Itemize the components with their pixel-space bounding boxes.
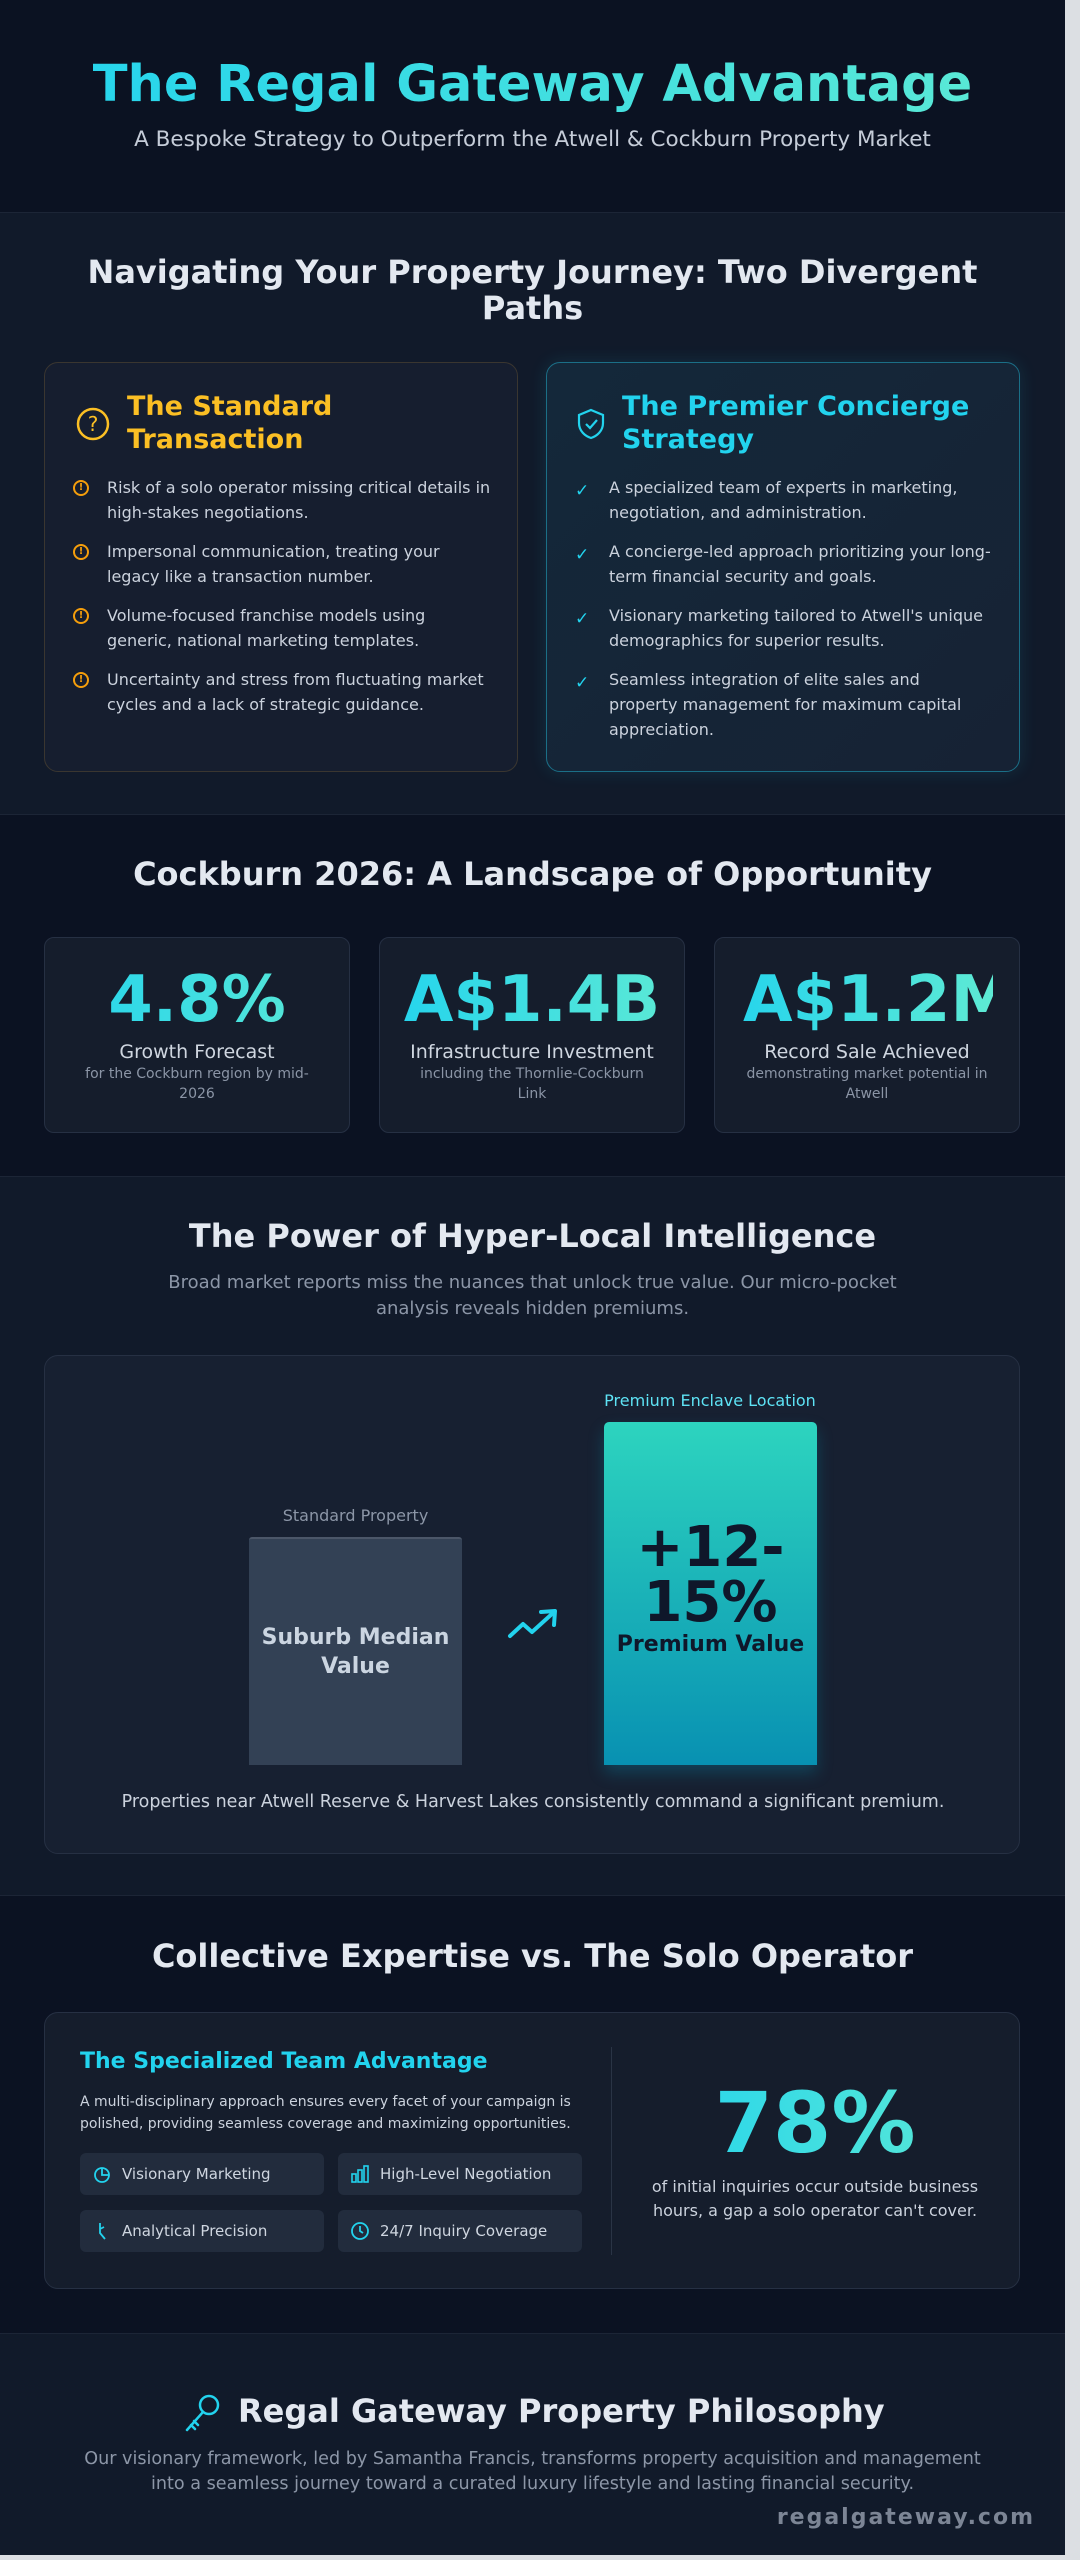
card heading: Strategy xyxy=(622,424,754,455)
stat card: record sale xyxy=(714,937,1020,1133)
heading: Navigating Your Property Journey: Two Divergent xyxy=(88,253,977,291)
bar: premium value: +12- xyxy=(636,1515,785,1580)
stat card: growth: for the Cockburn region by mid-2026 xyxy=(85,1066,309,1102)
section: Cockburn 2026 xyxy=(0,814,1065,1176)
icon: question: ? xyxy=(88,412,98,436)
heading: Cockburn 2026: A Landscape of Opportunity xyxy=(133,855,932,893)
card heading: The Standard xyxy=(127,391,332,422)
bullet list: ! xyxy=(79,610,83,621)
card heading xyxy=(127,391,332,455)
chip: analytical precision: Analytical Precision xyxy=(122,2222,267,2240)
big stat: 78%: 78% xyxy=(714,2074,916,2172)
bullet list: ! xyxy=(79,674,83,685)
description: A multi-disciplinary approach ensures every facet of your campaign is polished, providing seamless coverage and maximizing opportunities. xyxy=(80,2094,571,2132)
bullet list: Uncertainty and stress from fluctuating market cycles and a lack of strategic guidance. xyxy=(107,670,484,714)
chip: 24/7 coverage xyxy=(338,2210,582,2252)
bullet list: Impersonal communication, treating your xyxy=(107,542,440,561)
bar: suburb median: Value xyxy=(321,1654,390,1679)
chip: 24/7 coverage: 24/7 Inquiry Coverage xyxy=(380,2222,547,2240)
icon: shield xyxy=(578,408,604,440)
heading with key icon: Regal Gateway Property Philosophy xyxy=(238,2392,885,2430)
heading xyxy=(88,253,977,327)
stat card: growth: 4.8% xyxy=(108,963,286,1037)
chip: visionary marketing: Visionary Marketing xyxy=(122,2165,271,2183)
big stat: 78%: of initial inquiries occur outside business xyxy=(652,2177,978,2196)
chip: negotiation xyxy=(338,2153,582,2195)
heading: Collective Expertise vs. The Solo Operator xyxy=(152,1937,913,1975)
card heading: Transaction xyxy=(127,424,303,455)
title: The Regal Gateway Advantage xyxy=(93,55,972,114)
bar: suburb median xyxy=(249,1537,462,1765)
checklist: A concierge-led approach prioritizing your long-term financial security and goals. xyxy=(609,542,991,586)
stat card: infrastructure: including the Thornlie-Cockburn Link xyxy=(420,1066,644,1102)
stat card: growth: Growth Forecast xyxy=(119,1041,275,1063)
section: two paths xyxy=(0,212,1065,814)
chip: visionary marketing xyxy=(80,2153,324,2195)
paragraph: into a seamless journey toward a curated luxury lifestyle and lasting financial security. xyxy=(151,2474,914,2494)
bar: premium value xyxy=(604,1422,817,1765)
checklist: A specialized team of experts in marketing, negotiation, and administration. xyxy=(609,478,957,522)
subheading: The Specialized Team Advantage xyxy=(80,2049,488,2074)
label: standard property: Standard Property xyxy=(283,1506,428,1525)
chart panel xyxy=(44,1355,1020,1854)
checklist: ✓ xyxy=(575,673,589,693)
bullet list xyxy=(73,478,490,714)
bar: premium value: Premium Value xyxy=(617,1632,804,1657)
checklist xyxy=(575,478,991,739)
arrow: trending up xyxy=(508,1609,557,1638)
checklist: Seamless integration of elite sales and xyxy=(609,670,920,689)
header section xyxy=(0,0,1065,212)
paragraph: Our visionary framework, led by Samantha Francis, transforms property acquisition and management xyxy=(84,2449,981,2469)
big stat: 78%: hours, a gap a solo operator can't cover. xyxy=(653,2201,977,2220)
url: regalgateway.com xyxy=(777,2505,1035,2530)
stat card: growth xyxy=(44,937,350,1133)
chip: analytical precision xyxy=(80,2210,324,2252)
section: collective expertise xyxy=(0,1895,1065,2333)
heading: Paths xyxy=(482,289,583,327)
description: Broad market reports miss the nuances that unlock true value. Our micro-pocket analysis reveals hidden premiums. xyxy=(168,1272,897,1319)
bullet list: ! xyxy=(79,546,83,557)
checklist: ✓ xyxy=(575,481,589,501)
subtitle: A Bespoke Strategy to Outperform the Atwell & Cockburn Property Market xyxy=(134,127,931,152)
section: hyper-local intelligence xyxy=(0,1176,1065,1895)
bullet list: ! xyxy=(79,482,83,493)
bullet list: legacy like a transaction number. xyxy=(107,567,374,586)
panel: premier concierge xyxy=(546,362,1020,772)
icon: question xyxy=(76,408,110,440)
bar: premium value: 15% xyxy=(643,1570,778,1635)
chip: negotiation: High-Level Negotiation xyxy=(380,2165,551,2183)
bullet list: Volume-focused franchise models using xyxy=(107,606,425,625)
stat card: record sale: demonstrating market potential in Atwell xyxy=(747,1066,987,1102)
bar: suburb median: Suburb Median xyxy=(262,1625,449,1650)
checklist: ✓ xyxy=(575,545,589,565)
bullet list: generic, national marketing templates. xyxy=(107,631,419,650)
card heading: The Premier Concierge xyxy=(622,391,969,422)
bullet list: Risk of a solo operator missing critical details in high-stakes negotiations. xyxy=(107,478,490,522)
stat card: infrastructure xyxy=(379,937,685,1133)
panel: team advantage xyxy=(44,2012,1020,2289)
big stat: 78% xyxy=(652,2074,978,2220)
stat card: record sale: Record Sale Achieved xyxy=(764,1041,970,1063)
checklist: Visionary marketing tailored to Atwell's unique demographics for superior results. xyxy=(609,606,983,650)
stat card: infrastructure: A$1.4B xyxy=(404,963,660,1037)
panel: standard transaction xyxy=(44,362,518,772)
paragraph xyxy=(84,2449,981,2494)
heading: The Power of Hyper-Local Intelligence xyxy=(189,1217,876,1255)
icon: key xyxy=(186,2394,220,2432)
card heading xyxy=(622,391,969,455)
checklist: property management for maximum capital appreciation. xyxy=(609,695,961,739)
label: premium enclave: Premium Enclave Location xyxy=(604,1391,816,1410)
caption: Properties near Atwell Reserve & Harvest Lakes consistently command a significant premium. xyxy=(122,1792,944,1812)
section: philosophy footer xyxy=(0,2333,1065,2555)
checklist: ✓ xyxy=(575,609,589,629)
stat card: infrastructure: Infrastructure Investment xyxy=(410,1041,654,1063)
